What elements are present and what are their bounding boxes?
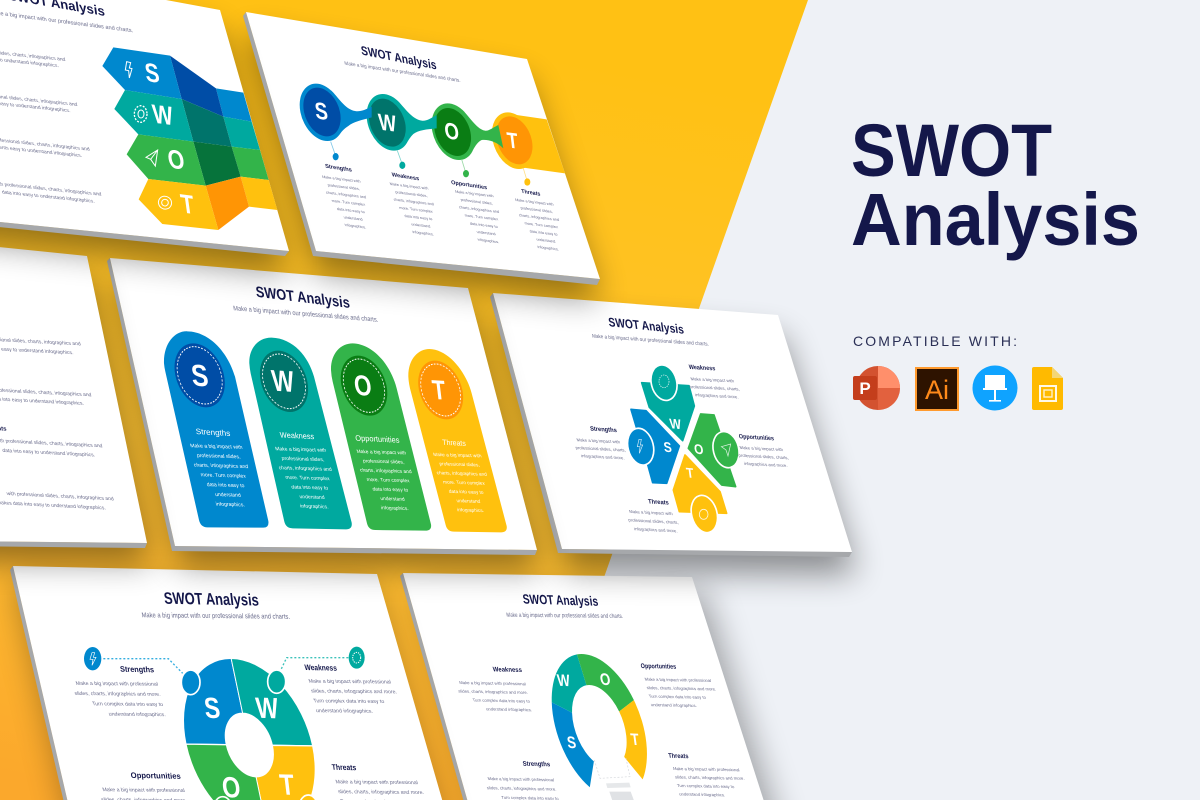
text: Threats: understand	[456, 498, 481, 505]
icon: paper plane	[146, 150, 158, 166]
text: Opportunities: professional slides,	[362, 458, 405, 466]
text: Opportunities: more. Turn complex	[366, 477, 411, 484]
ribbon: O	[127, 134, 269, 186]
text: Strengths: Make a big impact with	[321, 174, 361, 184]
text: row 4: with professional slides, charts, infographics and	[6, 491, 115, 502]
icon: PowerPoint: P	[859, 379, 871, 398]
blob: Weakness: W	[377, 109, 399, 137]
blob: Strengths	[295, 84, 372, 141]
text: Weakness: Turn complex data into easy to	[472, 698, 531, 704]
ribbon: W: W	[151, 100, 175, 132]
label: Opportunities: Opportunities	[130, 771, 182, 781]
text: Weakness: Make a big impact with professional	[459, 680, 526, 686]
text: Strengths: understand	[343, 214, 363, 222]
ring letters: O	[599, 671, 612, 690]
petal: Opportunities	[688, 414, 743, 487]
ring letters: S	[566, 734, 577, 753]
text: Weakness: infographics.	[412, 229, 434, 237]
text: Weakness: understand	[299, 494, 326, 501]
text: Weakness: slides, charts, infographics and more.	[458, 689, 528, 695]
donut bubbles	[181, 670, 317, 800]
text: Threats: more. Turn complex	[524, 220, 559, 229]
main title	[851, 109, 1140, 261]
ribbon: W	[114, 90, 260, 150]
slide subtitle: Make a big impact with our professional slides and charts.	[141, 612, 290, 621]
ribbon: O: O	[166, 145, 187, 176]
text: Strengths: more. Turn complex	[200, 472, 247, 480]
label: Opportunities: Opportunities	[451, 180, 488, 191]
label: Weakness: Weakness	[391, 172, 420, 182]
text: Threats: data into easy to	[448, 489, 485, 496]
text: Strengths: slides, charts, infographics and more.	[74, 691, 161, 698]
badge: S: S	[189, 357, 210, 393]
text: Opportunities: Make a big impact with	[739, 445, 784, 452]
petal: Weakness	[642, 362, 694, 441]
text: Opportunities: professional slides,	[460, 197, 493, 206]
text: Threats: data into easy to	[529, 228, 558, 237]
text: Threats: infographics.	[457, 507, 485, 514]
text: Weakness: slides, charts, infographics and more.	[310, 689, 398, 695]
text: Weakness: understand infographics.	[315, 708, 374, 715]
text: Weakness: Make a big impact with	[275, 446, 327, 454]
text: Weakness: more. Turn complex	[399, 205, 433, 214]
badge: S	[169, 343, 230, 407]
text: Weakness: understand	[410, 221, 431, 229]
compatible with heading: COMPATIBLE WITH:	[853, 333, 1017, 349]
text: Opportunities: Make a big impact with	[454, 189, 494, 198]
icon: PowerPoint	[853, 366, 900, 410]
petal: Threats	[673, 455, 727, 536]
donut letters: S	[202, 691, 222, 725]
text: Weakness: infographics and more.	[694, 392, 739, 399]
main title: Analysis	[851, 178, 1140, 261]
ring letters: T	[630, 731, 641, 750]
text: Strengths: infographics.	[344, 222, 367, 230]
label: Weakness: Weakness	[492, 666, 523, 674]
blob: Opportunities	[427, 103, 503, 160]
label: Strengths: Strengths	[522, 761, 551, 768]
petal letters	[663, 415, 704, 481]
text: row 4: data into easy to understand infographics.	[1, 190, 95, 205]
label: Threats: Threats	[668, 753, 689, 760]
text: Threats: Make a big impact with professional	[335, 779, 419, 786]
badge: O: O	[352, 370, 373, 403]
text: Threats: professional slides,	[520, 205, 553, 214]
badge: W	[255, 351, 313, 412]
text: Opportunities: charts, infographics and	[458, 204, 500, 214]
slide: blob chain (top centre)	[243, 12, 600, 301]
text: Strengths: data into easy to	[336, 206, 365, 214]
text: Opportunities: understand infographics.	[650, 702, 697, 708]
text: Threats: understand infographics.	[679, 792, 726, 797]
light bulb base	[594, 758, 635, 800]
slide title: SWOT Analysis	[360, 43, 437, 72]
text: Opportunities: charts, infographics and	[359, 468, 413, 475]
badge: T: T	[431, 376, 447, 406]
badge: W: W	[270, 364, 296, 399]
text: Strengths: professional slides, charts,	[575, 445, 626, 453]
text: Weakness: understand infographics.	[485, 706, 532, 712]
slide subtitle: Make a big impact with our professional slides and charts.	[592, 334, 709, 348]
blob: Strengths: S	[313, 97, 329, 126]
ring letters: W	[556, 671, 572, 691]
text: Opportunities: Make a big impact with	[356, 449, 407, 456]
blob: Opportunities: O	[443, 118, 461, 146]
petal: Strengths	[624, 409, 679, 483]
icon: Google Slides	[1032, 367, 1063, 410]
text: Weakness: data into easy to	[291, 485, 329, 492]
text: Strengths: understand infographics.	[108, 712, 166, 718]
donut letters	[202, 691, 296, 800]
ring letters	[556, 671, 641, 753]
label: Threats: Threats	[331, 763, 357, 772]
dotted connector: Strengths	[103, 659, 183, 673]
text: Threats: professional slides, charts,	[628, 517, 679, 525]
text: Opportunities: understand	[380, 496, 406, 503]
text: Weakness: professional slides,	[281, 456, 325, 463]
text: Threats: Turn complex data into easy to	[676, 783, 735, 789]
text: Strengths: Make a big impact with professional	[487, 776, 555, 782]
text: Opportunities: infographics and more.	[743, 461, 788, 468]
text: Opportunities: Turn complex data into easy to	[648, 694, 707, 700]
text: Threats: Make a big impact with	[433, 452, 483, 459]
text: Strengths: more. Turn complex	[331, 198, 366, 207]
text: Weakness: Turn complex data into easy to	[313, 698, 385, 705]
slide subtitle: Make a big impact with our professional slides and charts.	[344, 61, 461, 84]
yellow diagonal panel	[0, 0, 808, 800]
text: Opportunities: professional slides, charts,	[738, 453, 789, 460]
text: Opportunities: infographics.	[380, 505, 409, 512]
badge: T	[413, 361, 468, 419]
badge: O	[335, 356, 392, 416]
card: Threats	[408, 349, 507, 532]
text: Strengths: Make a big impact with professional	[75, 681, 159, 688]
text: Threats: charts, infographics and	[518, 212, 560, 222]
text: Weakness: infographics.	[300, 504, 329, 510]
label: Weakness: Weakness	[688, 364, 716, 372]
text: Strengths: charts, infographics and	[325, 190, 367, 199]
slide title: SWOT Analysis	[255, 284, 351, 312]
text: Weakness: professional slides, charts,	[689, 384, 740, 392]
petal letters: O	[693, 441, 704, 458]
blob: Threats: T	[506, 129, 520, 154]
slide: petal diagram (right)	[490, 293, 856, 574]
pins	[331, 142, 530, 186]
icon: Strengths badge	[84, 647, 101, 670]
petal letters: S	[663, 439, 673, 456]
text: Weakness: data into easy to	[404, 213, 433, 221]
text: Strengths: Make a big impact with	[190, 443, 243, 451]
text: Threats: slides, charts, infographics and more.	[674, 775, 745, 781]
text: row 3: data into easy to understand infographics.	[2, 448, 96, 458]
ribbon: T: T	[179, 190, 196, 221]
label: Strengths: Strengths	[325, 164, 352, 174]
blob: Weakness	[362, 94, 437, 151]
text: Weakness: Make a big impact with	[389, 181, 429, 191]
label: Strengths: Strengths	[195, 427, 231, 438]
text: Threats: Make a big impact with professional	[672, 766, 740, 772]
text: Threats: Make a big impact with	[514, 197, 554, 207]
blob: Threats	[487, 112, 565, 173]
text: Strengths: infographics and more.	[580, 453, 625, 460]
ribbon: S	[102, 47, 252, 122]
text: Threats: infographics and more.	[633, 526, 678, 533]
text: Opportunities: infographics.	[477, 237, 500, 244]
icon: target	[156, 194, 174, 212]
label: Weakness: Weakness	[304, 663, 338, 673]
label: Strengths: Strengths	[590, 426, 618, 434]
text: Weakness: Make a big impact with	[690, 376, 735, 383]
text: Opportunities: data into easy to	[372, 487, 409, 494]
petal letters: T	[685, 465, 695, 481]
icon: lightning	[125, 62, 132, 78]
text: Threats: slides, charts, infographics and more.	[337, 789, 425, 796]
label: Opportunities: Opportunities	[738, 433, 775, 442]
text: Strengths: professional slides,	[196, 453, 241, 460]
text: Weakness: charts, infographics and	[393, 197, 434, 206]
slide: tall rounded cards (centre)	[107, 258, 541, 570]
text: Weakness: Make a big impact with professional	[308, 679, 392, 685]
card: Strengths	[164, 331, 268, 528]
slide: text list (left edge)	[0, 242, 151, 563]
text: Opportunities: understand	[476, 229, 496, 236]
text: Threats: Make a big impact with	[629, 509, 674, 516]
icon: Keynote	[972, 366, 1018, 410]
label: Threats: Threats	[521, 189, 541, 198]
label: Strengths: Strengths	[119, 665, 155, 674]
card: Weakness	[249, 338, 352, 529]
slide subtitle: Make a big impact with our professional slides and charts.	[506, 613, 624, 620]
slide: ring diagram (bottom centre)	[400, 573, 782, 800]
petal letters: W	[669, 415, 683, 432]
label: Threats: Threats	[648, 498, 670, 507]
slide: donut diagram (bottom left)	[10, 566, 448, 800]
slide title: SWOT Analysis	[163, 589, 260, 610]
text: Strengths: slides, charts, infographics and more.	[486, 785, 557, 792]
label: Weakness: Weakness	[279, 431, 315, 441]
text: Opportunities: more. Turn complex	[464, 213, 499, 221]
label: Threats: Threats	[442, 438, 466, 448]
text: Strengths: charts, infographics and	[193, 463, 249, 470]
text: Opportunities: slides, charts, infographics and more.	[646, 685, 717, 692]
text: Threats: infographics.	[537, 244, 559, 252]
text: Strengths: Make a big impact with	[576, 437, 621, 444]
slide title: SWOT Analysis	[607, 314, 685, 337]
text: Threats: more. Turn complex	[442, 480, 486, 487]
text: Strengths: data into easy to	[206, 482, 245, 489]
text: Strengths: Turn complex data into easy to	[92, 701, 164, 708]
text: Opportunities: Make a big impact with professional	[102, 787, 185, 794]
text: Threats: professional slides,	[439, 461, 480, 468]
text: Strengths: understand	[215, 492, 242, 499]
slide title: SWOT Analysis	[522, 592, 599, 609]
text: Strengths: infographics.	[215, 502, 246, 508]
card: Opportunities	[331, 343, 431, 531]
donut chart	[168, 657, 331, 800]
ribbon: S: S	[143, 58, 161, 89]
donut letters: W	[254, 691, 281, 725]
text: Weakness: professional slides,	[394, 189, 428, 198]
main title: SWOT	[851, 109, 1052, 192]
text: Weakness: more. Turn complex	[285, 475, 331, 482]
icon: Weakness badge	[349, 647, 365, 669]
slide: isometric ribbons (top left)	[0, 0, 289, 273]
label: Opportunities: Opportunities	[640, 663, 677, 671]
text: Threats: charts, infographics and	[436, 470, 488, 478]
ribbon: T	[139, 177, 277, 230]
text: Opportunities: Make a big impact with professional	[644, 677, 712, 683]
label: Opportunities: Opportunities	[355, 434, 400, 445]
slide subtitle: Make a big impact with our professional slides and charts.	[233, 305, 379, 324]
dotted connector: Weakness	[280, 658, 348, 672]
text: Threats: understand	[536, 237, 556, 244]
icon: Illustrator	[915, 367, 959, 411]
text: Weakness: charts, infographics and	[278, 465, 333, 473]
text: Opportunities: data into easy to	[469, 221, 498, 229]
icon: Illustrator: Ai	[925, 375, 949, 405]
text: Strengths: professional slides,	[327, 182, 360, 191]
ring chart	[538, 653, 658, 788]
icon: gear	[134, 106, 147, 122]
